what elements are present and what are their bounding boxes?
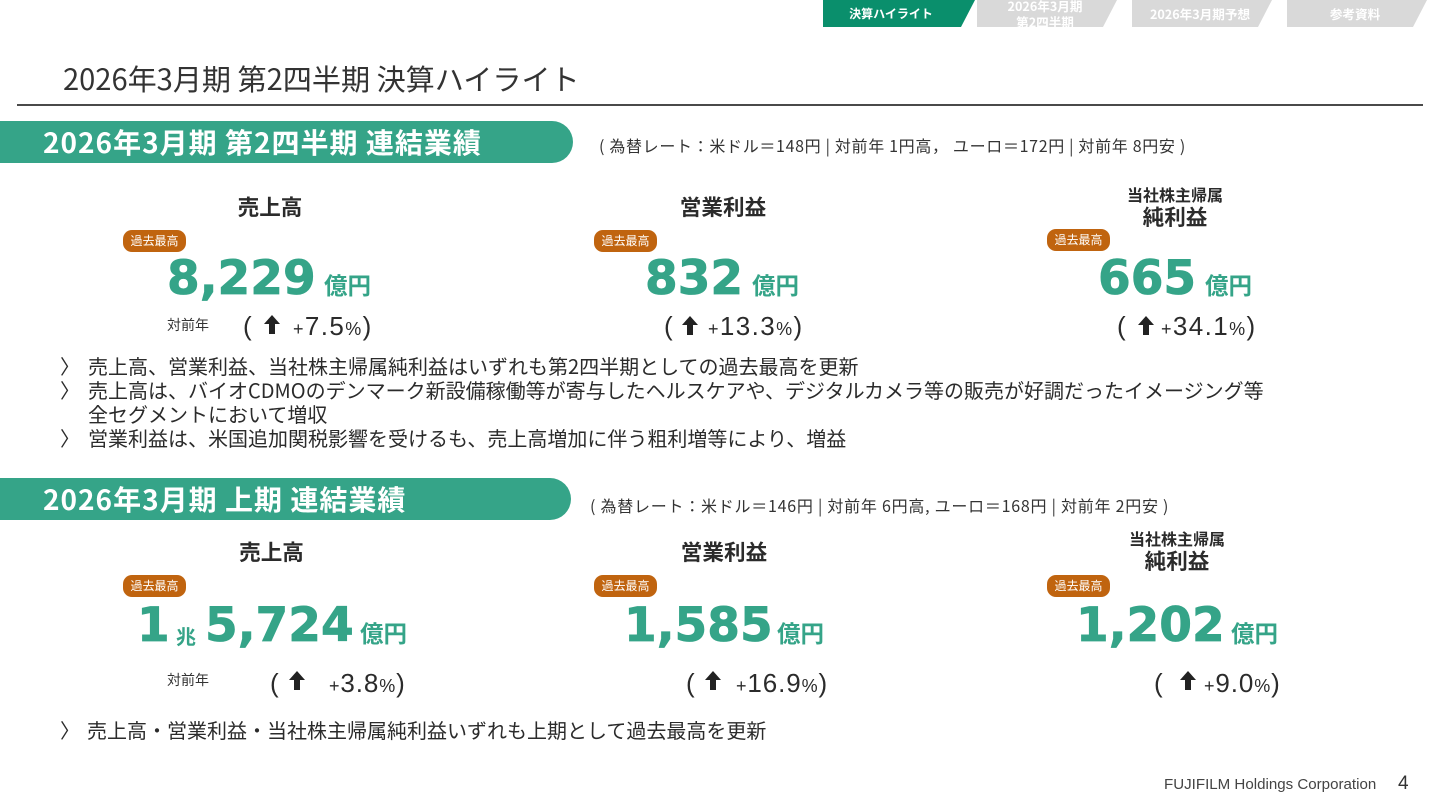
yoy open paren: ( (664, 311, 674, 341)
footer: page number: 4 (1398, 773, 1409, 794)
bullet list: Q2: 全セグメントにおいて増収 (88, 399, 327, 428)
unit: 億円 (360, 615, 407, 649)
heading: 営業利益 (680, 191, 766, 222)
value: 1 (137, 598, 170, 653)
yoy open paren: ( (686, 668, 696, 698)
tab: 参考資料: 参考資料 (1330, 4, 1380, 23)
title: 2026年3月期 第2四半期 決算ハイライト (63, 57, 580, 99)
heading: 純利益 (1145, 545, 1209, 576)
value: 5,724 (205, 598, 354, 653)
text: 売上高・営業利益・当社株主帰属純利益いずれも上期として過去最高を更新 (87, 715, 766, 744)
yoy value: +9.0%) (1204, 668, 1281, 698)
value: 1,585 (624, 598, 773, 653)
section band: Q2 (0, 121, 573, 163)
yoy open paren: ( (270, 668, 280, 698)
badge: 過去最高 (130, 577, 178, 594)
icon: up arrow (705, 671, 721, 690)
yoy value: +16.9%) (736, 668, 828, 698)
title rule (17, 104, 1423, 106)
yoy value: +13.3%) (708, 311, 804, 341)
bullet 3 (60, 423, 846, 452)
metric: Q2 sales (123, 191, 373, 341)
heading: 営業利益 (681, 536, 767, 567)
section band: H1 (0, 478, 571, 520)
badge: 過去最高 (1054, 577, 1102, 594)
badge: 過去最高 (130, 232, 178, 249)
badge (594, 575, 657, 597)
value: 665 (1098, 251, 1196, 306)
bullet: H1 (60, 715, 766, 744)
heading (1129, 526, 1225, 576)
metric: H1 operating income (594, 536, 828, 698)
value: 1,202 (1076, 598, 1225, 653)
bullet 3: 〉 (60, 423, 80, 452)
badge: 過去最高 (601, 232, 650, 249)
heading (1127, 182, 1223, 232)
unit: 億円 (324, 267, 371, 301)
icon: up arrow (1180, 671, 1196, 690)
exchange rate: Q2: ( 為替レート：米ドル＝148円 | 対前年 1円高， ユーロ＝172円 | 対前年 8円安 ) (599, 133, 1186, 157)
bullet 2 (60, 375, 1264, 428)
yoy label: 対前年 (167, 315, 209, 335)
unit: 億円 (752, 267, 799, 301)
bullet list: Q2: 営業利益は、米国追加関税影響を受けるも、売上高増加に伴う粗利増等により、増益 (88, 423, 846, 452)
badge: 過去最高 (1054, 231, 1102, 248)
tab: 決算ハイライト (823, 0, 975, 27)
metric: H1 sales (123, 536, 407, 698)
unit: 億円 (1205, 267, 1252, 301)
exchange rate: H1: ( 為替レート：米ドル＝146円 | 対前年 6円高, ユーロ＝168円 | 対前年 2円安 ) (590, 493, 1169, 517)
yoy value: +3.8%) (329, 668, 406, 698)
badge (594, 230, 657, 252)
unit: 億円 (777, 615, 824, 649)
section heading: Q2: 2026年3月期 第2四半期 連結業績 (43, 122, 482, 162)
bullet 1: 〉 (60, 351, 80, 380)
value: 8,229 (167, 251, 316, 306)
icon: up arrow (1138, 316, 1154, 335)
yoy open paren: ( (243, 311, 253, 341)
badge (1047, 575, 1110, 597)
tab: 2026年3月期 第2四半期 (977, 0, 1117, 27)
badge: 過去最高 (601, 577, 650, 594)
bullet list: Q2 (60, 351, 1264, 452)
bullet list: Q2: 売上高は、バイオCDMOのデンマーク新設備稼働等が寄与したヘルスケアや、デジタルカメラ等の販売が好調だったイメージング等 (88, 375, 1264, 404)
bullet list: Q2: 売上高、営業利益、当社株主帰属純利益はいずれも第2四半期としての過去最高を更新 (88, 351, 858, 380)
heading: 純利益 (1143, 201, 1207, 232)
bullet 1 (60, 351, 858, 380)
value: 832 (645, 251, 743, 306)
bullet: H1: 〉 (60, 715, 80, 744)
badge (123, 575, 186, 597)
yoy open paren: ( (1154, 668, 1164, 698)
tab: 決算ハイライト: 決算ハイライト (849, 5, 933, 22)
footer: company name: FUJIFILM Holdings Corporation (1164, 776, 1376, 793)
metric: Q2 operating income (594, 191, 804, 341)
heading: 売上高 (239, 536, 304, 567)
yoy value: +7.5%) (293, 311, 373, 341)
badge (1047, 229, 1110, 251)
navigation tabs (823, 0, 1427, 27)
yoy open paren: ( (1117, 311, 1127, 341)
bullet 2: 〉 (60, 375, 80, 404)
icon: up arrow (289, 671, 305, 690)
metric: H1 net income (1047, 526, 1281, 698)
icon: up arrow (682, 316, 698, 335)
metric: Q2 net income (1047, 182, 1257, 341)
tab: 参考資料 (1287, 0, 1427, 27)
yoy value: +34.1%) (1161, 311, 1257, 341)
yoy label: 対前年 (167, 670, 209, 690)
tab: 2026年3月期予想 (1132, 0, 1272, 27)
heading: 売上高 (238, 191, 302, 222)
heading: 当社株主帰属 (1129, 526, 1225, 550)
section heading: H1: 2026年3月期 上期 連結業績 (43, 479, 406, 519)
tab: 2026年3月期予想: 2026年3月期予想 (1150, 4, 1250, 23)
trillion unit: 兆 (176, 621, 196, 650)
unit: 億円 (1231, 615, 1278, 649)
badge (123, 230, 186, 252)
icon: up arrow (264, 315, 280, 334)
heading: 当社株主帰属 (1127, 182, 1223, 206)
